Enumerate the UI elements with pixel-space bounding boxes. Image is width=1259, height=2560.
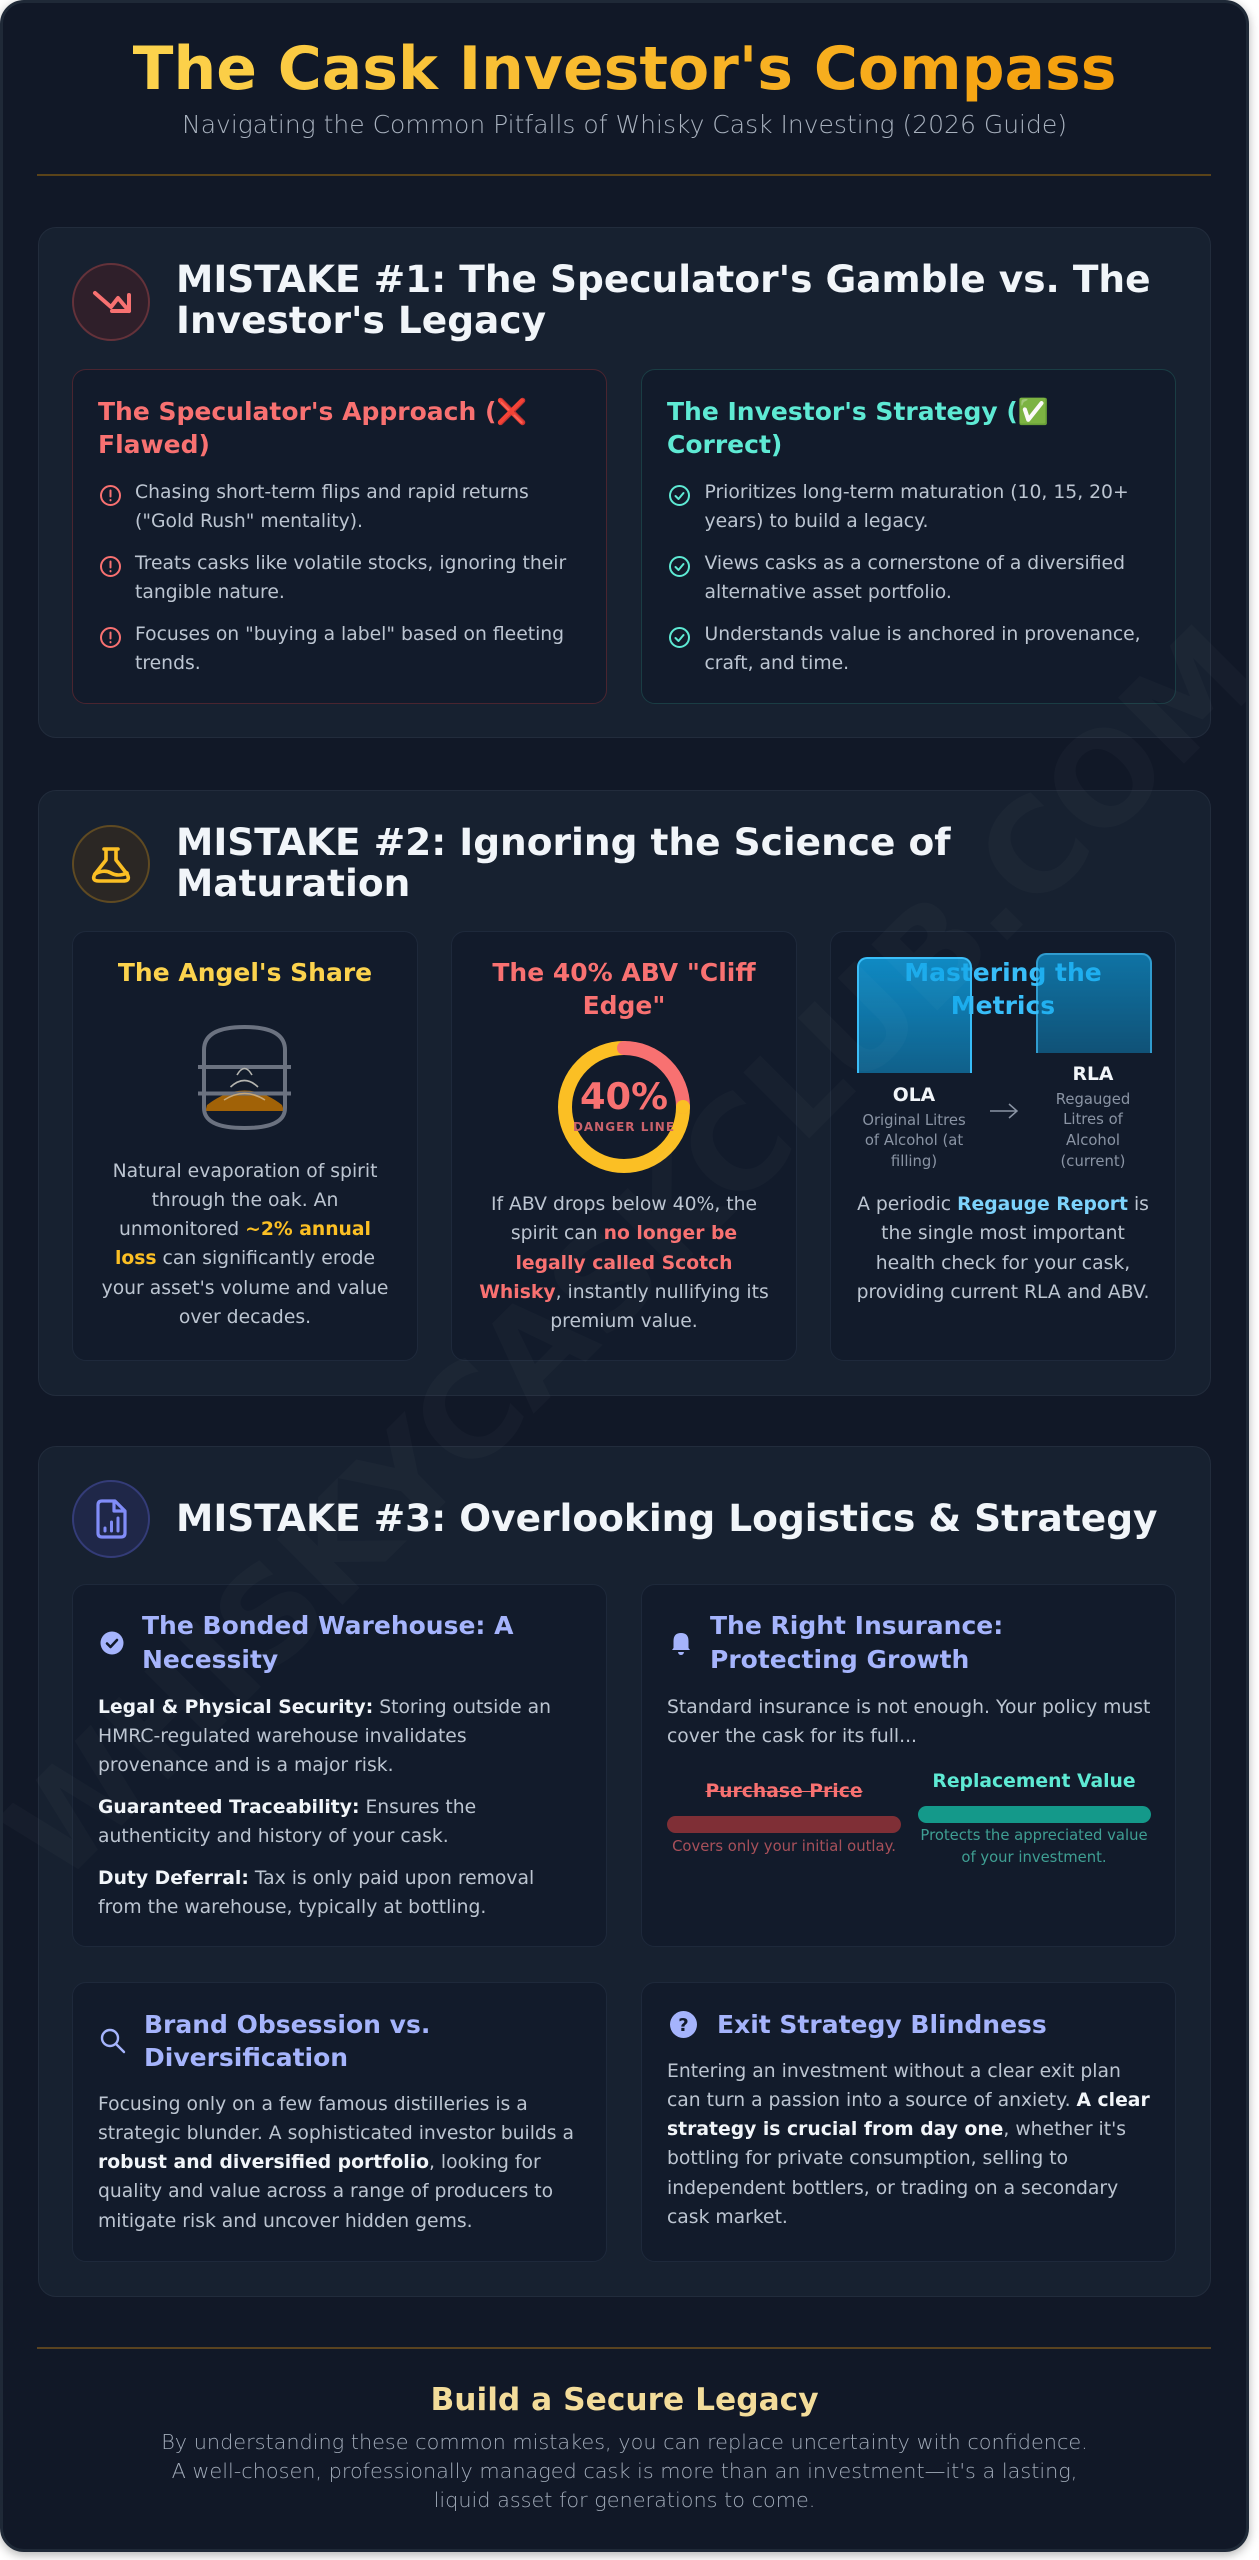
list item: Treats casks like volatile stocks, ignoring their <box>135 553 566 574</box>
title: The Cask Investor's Compass <box>133 34 1116 104</box>
text: warehouse 1: Legal & Physical Security: Storing outside an <box>98 1697 551 1718</box>
list item: alternative asset portfolio. <box>704 582 952 603</box>
arrow <box>990 1104 1018 1118</box>
list item: years) to build a legacy. <box>704 511 929 532</box>
heading: mistake 2 <box>176 820 951 905</box>
heading: mistake 3: MISTAKE #3: Overlooking Logistics & Strategy <box>176 1496 1157 1540</box>
card heading: metrics <box>904 958 1102 1020</box>
text: insurance <box>667 1697 1150 1747</box>
card: brand obsession <box>72 1982 607 2262</box>
list item: Focuses on "buying a label" based on fleeting <box>135 624 564 645</box>
list item <box>704 482 1129 532</box>
text: angel's share: through the oak. An <box>152 1190 338 1211</box>
gauge label: DANGER LINE <box>573 1120 675 1134</box>
icon: cask with evaporation <box>198 1025 291 1130</box>
text: brand obsession <box>98 2094 574 2232</box>
text: warehouse 3: Duty Deferral: Tax is only paid upon removal <box>98 1868 534 1888</box>
panel: mistake 3 <box>38 1446 1211 2297</box>
card heading: speculator <box>98 397 528 459</box>
caption: OLA <box>862 1112 966 1170</box>
text: metrics: A periodic Regauge Report is <box>857 1194 1149 1215</box>
caption: RLA: (current) <box>1061 1153 1125 1170</box>
card heading: brand obsession: Diversification <box>144 2042 348 2072</box>
card heading: insurance: Protecting Growth <box>710 1645 969 1674</box>
card: investor <box>641 369 1176 704</box>
icon: file chart <box>72 1480 150 1558</box>
text: brand obsession: quality and value across a range of producers to <box>98 2181 553 2202</box>
caption: RLA: Alcohol <box>1066 1132 1120 1149</box>
text: metrics <box>857 1194 1149 1303</box>
card heading: cliff edge: Edge" <box>583 990 665 1020</box>
footer text <box>161 2430 1088 2512</box>
gauge: 40% ring <box>558 1041 690 1173</box>
bar: OLA <box>856 957 972 1073</box>
text: exit strategy: bottling for private consumption, selling to <box>667 2148 1068 2169</box>
list item <box>704 624 1141 674</box>
bar: RLA <box>1036 953 1152 1052</box>
icon: search <box>100 2028 126 2054</box>
card heading: insurance: The Right Insurance: <box>710 1611 1003 1640</box>
list item <box>135 482 529 532</box>
heading: mistake 1: Investor's Legacy <box>176 298 546 342</box>
text: warehouse 1 <box>98 1697 551 1776</box>
card heading: speculator: The Speculator's Approach (❌ <box>98 397 528 426</box>
icon: bell <box>672 1633 690 1655</box>
list item: ("Gold Rush" mentality). <box>135 511 363 532</box>
card: cliff edge <box>451 931 797 1361</box>
list item <box>704 553 1125 603</box>
text: exit strategy <box>667 2061 1150 2228</box>
label: OLA: OLA <box>893 1085 935 1106</box>
text: warehouse 2: authenticity and history of your cask. <box>98 1826 449 1847</box>
caption: OLA: Original Litres <box>862 1112 966 1129</box>
footer heading: Build a Secure Legacy <box>430 2382 819 2418</box>
text: angel's share: over decades. <box>179 1307 311 1328</box>
label: replacement value: Replacement Value <box>932 1770 1136 1792</box>
caption: OLA: filling) <box>891 1153 937 1170</box>
text: exit strategy: cask market. <box>667 2207 788 2228</box>
caption: replacement value: Protects the appreciated value <box>920 1827 1148 1844</box>
heading: mistake 2: MISTAKE #2: Ignoring the Science of <box>176 820 951 864</box>
bar: purchase price <box>666 1816 901 1833</box>
card heading: warehouse: Necessity <box>142 1645 278 1674</box>
icon: trending down <box>72 263 150 341</box>
card heading: brand obsession: Brand Obsession vs. <box>144 2010 430 2038</box>
card: exit strategy <box>641 1982 1176 2262</box>
card heading: metrics: Metrics <box>951 990 1055 1020</box>
text: exit strategy: can turn a passion into a source of anxiety. A clear <box>667 2090 1150 2111</box>
caption: purchase price: Covers only your initial outlay. <box>672 1838 896 1855</box>
text: warehouse 2 <box>98 1796 476 1847</box>
gauge value: 40% <box>580 1075 668 1118</box>
subtitle: Navigating the Common Pitfalls of Whisky Cask Investing (2026 Guide) <box>182 110 1067 138</box>
card heading: metrics: Mastering the <box>904 958 1102 986</box>
bar: replacement value <box>918 1806 1151 1823</box>
text: brand obsession: mitigate risk and uncover hidden gems. <box>98 2210 473 2232</box>
list item: trends. <box>135 653 201 674</box>
list item: Views casks as a cornerstone of a diversified <box>704 553 1125 574</box>
card heading: speculator: Flawed) <box>98 430 210 459</box>
text: brand obsession: strategic blunder. A sophisticated investor builds a <box>98 2123 574 2144</box>
card: angel's share <box>72 931 418 1361</box>
list item: Chasing short-term flips and rapid returns <box>135 482 529 503</box>
heading: mistake 2: Maturation <box>176 861 410 905</box>
card: bonded warehouse <box>72 1584 607 1947</box>
card: speculator <box>72 369 607 704</box>
text: warehouse 3 <box>98 1868 534 1918</box>
text: metrics: health check for your cask, <box>876 1253 1130 1274</box>
list item: Prioritizes long-term maturation (10, 15, 20+ <box>704 482 1129 503</box>
text: angel's share <box>102 1161 388 1328</box>
text: brand obsession: Focusing only on a few famous distilleries is a <box>98 2094 528 2115</box>
text: brand obsession: robust and diversified portfolio, looking for <box>98 2152 541 2173</box>
text: angel's share: unmonitored ~2% annual <box>119 1219 371 1240</box>
footer text: liquid asset for generations to come. <box>434 2488 815 2512</box>
heading: mistake 1 <box>176 257 1151 342</box>
text: cliff edge: legally called Scotch <box>515 1253 733 1274</box>
list item: tangible nature. <box>135 582 285 603</box>
text: cliff edge <box>479 1194 769 1332</box>
list item <box>135 624 564 674</box>
footer text: A well-chosen, professionally managed cask is more than an investment—it's a lasting, <box>172 2459 1077 2483</box>
text: angel's share: your asset's volume and value <box>102 1278 388 1298</box>
card heading: exit strategy: Exit Strategy Blindness <box>717 2010 1047 2038</box>
list item: craft, and time. <box>704 653 849 674</box>
card heading: investor <box>667 397 1049 459</box>
caption: replacement value: of your investment. <box>961 1849 1107 1866</box>
list item <box>134 553 566 603</box>
caption: replacement value <box>920 1827 1148 1866</box>
card: metrics <box>830 931 1176 1361</box>
text: warehouse 2: Guaranteed Traceability: Ensures the <box>98 1796 476 1818</box>
text: exit strategy: independent bottlers, or trading on a secondary <box>667 2178 1118 2198</box>
caption: RLA: Litres of <box>1063 1111 1123 1128</box>
footer text: By understanding these common mistakes, you can replace uncertainty with confidence. <box>161 2430 1088 2454</box>
text: exit strategy: strategy is crucial from day one, whether it's <box>667 2119 1126 2140</box>
text: angel's share: Natural evaporation of spirit <box>113 1161 377 1182</box>
card heading: investor: The Investor's Strategy (✅ <box>667 397 1049 426</box>
text: metrics: the single most important <box>881 1223 1125 1244</box>
panel: mistake 2 <box>38 790 1211 1396</box>
check bullets <box>669 485 690 648</box>
text: insurance: Standard insurance is not enough. Your policy must <box>667 1697 1150 1718</box>
text: cliff edge: premium value. <box>550 1311 698 1332</box>
text: angel's share: loss can significantly erode <box>115 1248 375 1269</box>
text: insurance: cover the cask for its full... <box>667 1726 917 1747</box>
caption: RLA: Regauged <box>1056 1091 1130 1108</box>
caption: OLA: of Alcohol (at <box>865 1132 963 1149</box>
caption: RLA <box>1056 1091 1130 1170</box>
card heading: investor: Correct) <box>667 430 782 459</box>
card heading: cliff edge: The 40% ABV "Cliff <box>492 958 756 986</box>
card: insurance <box>641 1584 1176 1947</box>
list item: Understands value is anchored in provenance, <box>704 624 1141 645</box>
card heading: insurance <box>710 1611 1003 1674</box>
text: warehouse 3: from the warehouse, typically at bottling. <box>98 1897 486 1918</box>
label: purchase price: Purchase Price <box>705 1780 863 1802</box>
card heading: warehouse: The Bonded Warehouse: A <box>142 1611 513 1640</box>
text: warehouse 1: provenance and is a major risk. <box>98 1755 394 1776</box>
heading: mistake 1: MISTAKE #1: The Speculator's Gamble vs. The <box>176 257 1151 301</box>
card heading: brand obsession <box>144 2010 430 2072</box>
panel: mistake 1 <box>38 227 1211 738</box>
card heading: warehouse <box>142 1611 514 1674</box>
text: cliff edge: spirit can no longer be <box>511 1223 737 1244</box>
text: metrics: providing current RLA and ABV. <box>857 1282 1149 1303</box>
icon: question: ? <box>678 2015 689 2036</box>
icon: flask <box>72 825 150 903</box>
text: cliff edge: Whisky, instantly nullifying its <box>479 1282 769 1303</box>
card heading: angel's share: The Angel's Share <box>118 958 372 986</box>
label: RLA: RLA <box>1073 1064 1113 1085</box>
card heading: cliff edge <box>492 958 756 1020</box>
icon: badge check <box>100 1632 124 1654</box>
icon: question <box>670 2011 697 2038</box>
text: warehouse 1: HMRC-regulated warehouse invalidates <box>98 1726 467 1747</box>
text: cliff edge: If ABV drops below 40%, the <box>491 1194 757 1215</box>
warning bullets <box>100 485 121 648</box>
text: exit strategy: Entering an investment without a clear exit plan <box>667 2061 1121 2082</box>
